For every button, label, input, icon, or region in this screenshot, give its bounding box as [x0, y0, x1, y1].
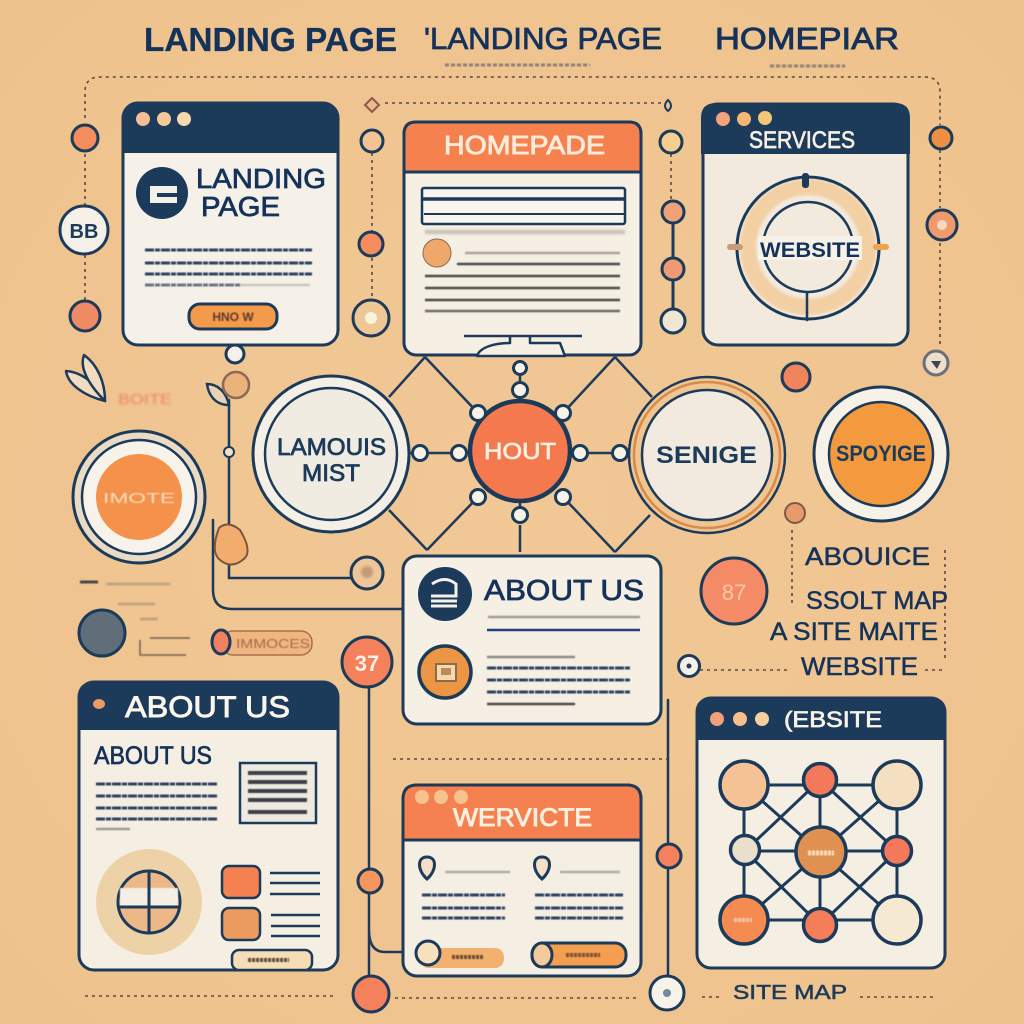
- text lines: [96, 784, 218, 829]
- badge: landing must circle: [253, 376, 409, 532]
- icon: about badge: [418, 567, 472, 621]
- icon: leaf left: [66, 355, 105, 401]
- panel: homepage window: [404, 122, 641, 356]
- heading: landing page: LANDING: [196, 163, 326, 194]
- badge: coral 87: 87: [722, 580, 746, 605]
- title: top heading row: LANDING PAGE: [144, 21, 397, 58]
- icon: avatar dot: [423, 239, 451, 267]
- button: [232, 950, 312, 970]
- text block: right labels: SSOLT MAP: [806, 587, 948, 615]
- icons: location pins: [420, 857, 550, 879]
- panel: services orange window: [403, 785, 641, 976]
- title: top heading row: HOMEPIAR: [715, 21, 899, 56]
- faded legend text marks: [80, 582, 190, 655]
- dotted top connector: [85, 77, 945, 998]
- middle timeline nodes: [353, 98, 685, 336]
- node: grey circle: [79, 610, 125, 656]
- badge: landing must circle: LAMOUIS: [277, 434, 386, 461]
- text block: right labels: A SITE MAITE: [770, 618, 938, 646]
- faint microtext under title: [445, 65, 845, 66]
- panel: services window: [701, 103, 910, 345]
- node: coral 37: 37: [355, 651, 379, 676]
- button: HNO W: [212, 310, 254, 324]
- chart: website ring: WEBSITE: [760, 239, 860, 262]
- icon: feature rows: [222, 866, 320, 940]
- panel: website sitemap window: (EBSITE: [784, 707, 882, 732]
- icon: image badge: [419, 646, 471, 698]
- panel: services window: SERVICES: [749, 127, 855, 154]
- panel: about us left window: [78, 682, 339, 970]
- icon: landing page badge: [136, 167, 188, 219]
- icon: swirl pin and leaf: [207, 345, 249, 405]
- panel: website sitemap window: [696, 698, 946, 968]
- faded coral label: BOITE: [118, 391, 172, 408]
- content lines: [425, 253, 620, 311]
- panel: about us centre card: [403, 556, 661, 724]
- body text lines: [145, 250, 312, 285]
- faded legend pill: [212, 630, 312, 655]
- panel: homepage window: HOMEPADE: [444, 130, 605, 160]
- title: top heading row: [144, 21, 899, 58]
- badge: orange storage circle: [814, 387, 948, 521]
- badge: left orange ring: IMOTE: [103, 490, 175, 507]
- chart: website ring: [727, 173, 889, 320]
- button: [189, 304, 277, 329]
- badge: landing must circle: MIST: [302, 460, 360, 487]
- node: small ring: [678, 656, 700, 676]
- timeline nodes lower: [353, 844, 684, 1012]
- heading: landing page: PAGE: [201, 191, 280, 222]
- text lines: [422, 872, 623, 918]
- faded legend pill: IMMOCES: [236, 636, 310, 651]
- connector: left trunk: [213, 400, 403, 609]
- heading: landing page: [196, 163, 326, 222]
- text block: right labels: ABOUICE: [805, 543, 930, 571]
- hub: central node with satellites: [412, 362, 628, 522]
- right timeline nodes: [782, 127, 957, 523]
- chart: site map network: [720, 761, 921, 944]
- title: top heading row: 'LANDING PAGE: [424, 21, 662, 56]
- panel: landing page window: [123, 103, 338, 345]
- node: connector end: [351, 557, 383, 589]
- panel: about us left window: ABOUT US: [125, 691, 290, 724]
- heading: about us: ABOUT US: [484, 575, 644, 607]
- network: diamond connector lines: [389, 357, 652, 552]
- badge: service circle: SENIGE: [656, 442, 757, 469]
- badge: left orange ring: [73, 431, 205, 563]
- badge: orange storage circle: SPOYIGE: [836, 441, 926, 466]
- badge: coral 87: [701, 558, 767, 624]
- image frame: [240, 763, 316, 823]
- panel: services orange window: WERVICTE: [453, 804, 592, 832]
- text block: right labels: WEBSITE: [801, 653, 918, 681]
- node: coral 37: [342, 637, 392, 687]
- text lines: [487, 617, 640, 704]
- left timeline nodes: [60, 125, 108, 331]
- icon: orange pin blob: [215, 524, 248, 565]
- icon: monitor stand: [464, 336, 582, 356]
- label: site map: SITE MAP: [733, 982, 847, 1004]
- buttons: [416, 941, 626, 968]
- hero image block: [422, 188, 625, 232]
- badge: service circle: [629, 377, 785, 533]
- left timeline nodes: BB: [70, 221, 98, 243]
- connector: trunk right of about panel: [369, 687, 668, 980]
- heading: about us: ABOUT US: [94, 742, 212, 770]
- text block: right labels: [770, 543, 948, 681]
- hub: central node with satellites: HOUT: [484, 438, 556, 464]
- icon: globe in circle: [96, 849, 202, 955]
